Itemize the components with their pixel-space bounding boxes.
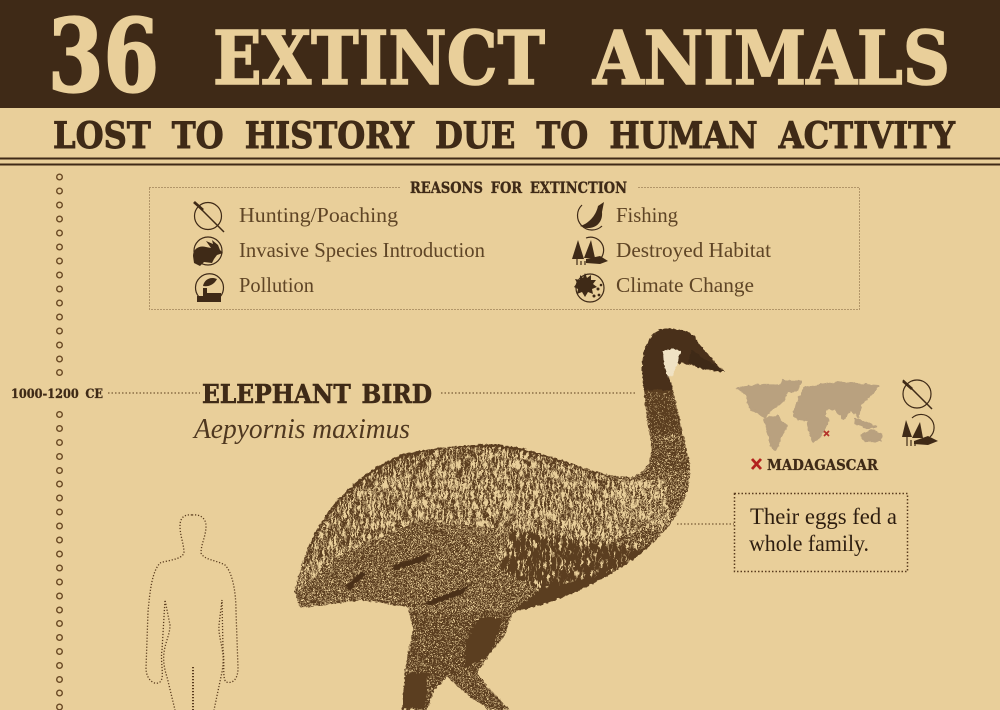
legend label: climate change: Climate Change: [616, 273, 754, 297]
callout: whole family.: [749, 531, 869, 556]
icon: habitat cause: [902, 414, 938, 446]
callout: [734, 494, 908, 572]
world map: [737, 381, 882, 451]
header banner: [0, 0, 1000, 115]
icon: climate change: [574, 273, 604, 302]
wing and leg shadows: [345, 553, 470, 606]
legend label: fishing: Fishing: [616, 203, 678, 227]
legend label: pollution: Pollution: [239, 273, 314, 297]
marker: madagascar: [824, 431, 829, 436]
underside plumage: [292, 520, 540, 612]
title: EXTINCT: [213, 16, 545, 102]
species name: ELEPHANT BIRD: [202, 380, 432, 410]
legend label: hunting: Hunting/Poaching: [239, 203, 399, 227]
location label: MADAGASCAR: [767, 456, 878, 474]
icon: destroyed habitat: [572, 237, 608, 265]
title: [48, 0, 950, 115]
date label: 1000-1200 CE: [11, 387, 103, 402]
icon: fishing: [578, 202, 604, 230]
head and neck shading: [642, 328, 725, 391]
latin name: Aepyornis maximus: [192, 414, 410, 445]
icon: hunting: [194, 202, 224, 232]
callout: Their eggs fed a: [750, 504, 897, 529]
icon: rabbit: [193, 237, 223, 266]
title: ANIMALS: [592, 16, 950, 102]
human scale silhouette: [146, 515, 238, 710]
timeline: [57, 174, 62, 710]
title: 36: [48, 0, 159, 115]
legend label: destroyed habitat: Destroyed Habitat: [616, 238, 771, 262]
legend heading: REASONS FOR EXTINCTION: [410, 178, 627, 197]
elephant bird illustration: [285, 320, 735, 710]
legend label: invasive species: Invasive Species Introduction: [239, 238, 485, 262]
icon: pollution: [196, 274, 224, 302]
beak and face: [663, 349, 680, 378]
body plumage: [297, 447, 670, 592]
panel: reasons for extinction legend: [150, 178, 860, 310]
icon: hunting cause: [903, 380, 932, 409]
